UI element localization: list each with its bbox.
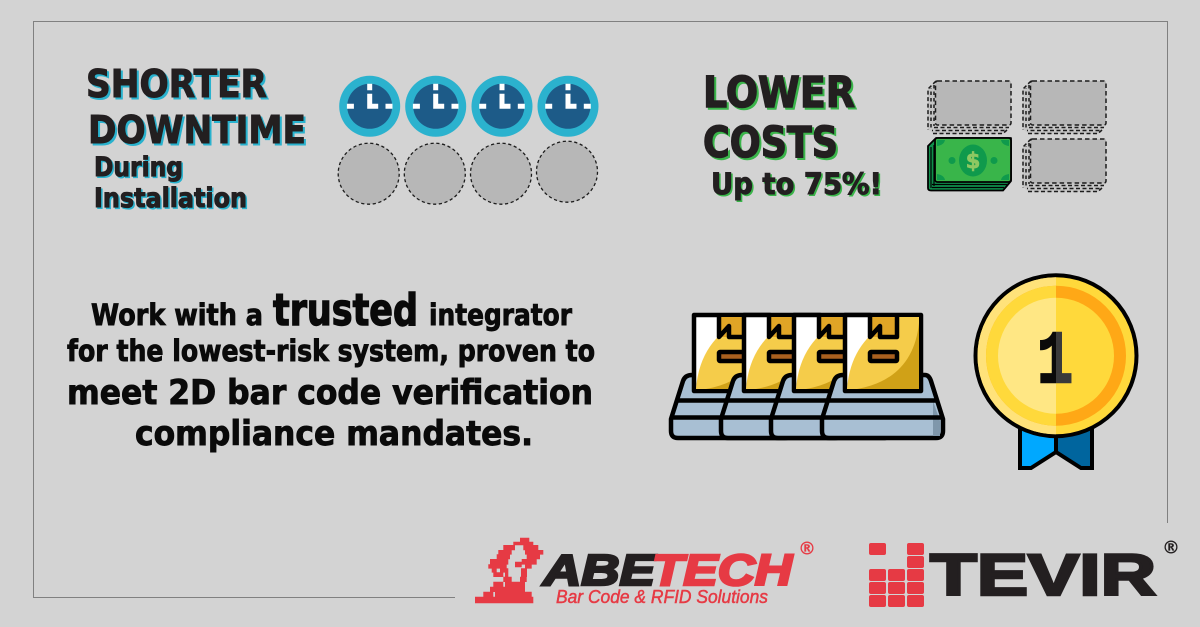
heading: lower costs xyxy=(703,68,884,202)
body text: integrator xyxy=(429,298,573,332)
logo: AbeTech xyxy=(475,538,816,607)
icon: green money stack: $ xyxy=(966,149,980,173)
heading: lower costs: COSTS xyxy=(705,120,840,170)
heading: lower costs: COSTS xyxy=(703,118,838,168)
heading: shorter downtime: SHORTER xyxy=(86,62,267,106)
logo: Tevir xyxy=(869,538,1180,608)
heading: shorter downtime: During xyxy=(94,152,183,183)
heading: lower costs: Up to 75%! xyxy=(711,167,882,201)
heading: shorter downtime: During xyxy=(96,154,184,184)
icon: first place medal xyxy=(976,275,1136,468)
registered mark: ® xyxy=(798,538,816,560)
logo: AbeTech: TECH xyxy=(652,546,793,595)
tagline: AbeTech: Bar Code & RFID Solutions xyxy=(556,586,768,607)
body text xyxy=(67,285,595,454)
icon: empty clock placeholders xyxy=(338,141,598,204)
wordmark: AbeTech: ABE xyxy=(542,546,657,595)
icon: Tevir red blocks xyxy=(869,543,924,607)
heading: lower costs: LOWER xyxy=(703,68,855,118)
heading: shorter downtime: SHORTER xyxy=(88,64,269,108)
body text: meet 2D bar code verification xyxy=(67,373,593,413)
body text: compliance mandates. xyxy=(135,414,533,454)
heading: lower costs: Up to 75%! xyxy=(712,168,884,202)
icon: empty money placeholders xyxy=(928,81,1106,192)
heading: shorter downtime: Installation xyxy=(94,183,247,214)
icon: green money stack xyxy=(928,138,1011,190)
icon: cartons on conveyor xyxy=(671,315,943,438)
body text: trusted xyxy=(273,285,418,336)
heading: lower costs: LOWER xyxy=(705,70,857,120)
heading: shorter downtime: DOWNTIME xyxy=(90,110,308,154)
registered mark: ® xyxy=(1162,538,1180,558)
body text: for the lowest-risk system, proven to xyxy=(67,334,595,368)
heading: shorter downtime: Installation xyxy=(96,184,248,216)
heading: shorter downtime: DOWNTIME xyxy=(88,108,306,152)
icon: first place medal: 1 xyxy=(1037,321,1073,405)
icon: AbeTech pixel figure xyxy=(475,538,543,603)
heading: shorter downtime xyxy=(86,62,308,216)
wordmark: Tevir: TEVIR xyxy=(930,543,1156,608)
body text: Work with a xyxy=(91,298,263,332)
icon: clocks xyxy=(339,76,598,137)
